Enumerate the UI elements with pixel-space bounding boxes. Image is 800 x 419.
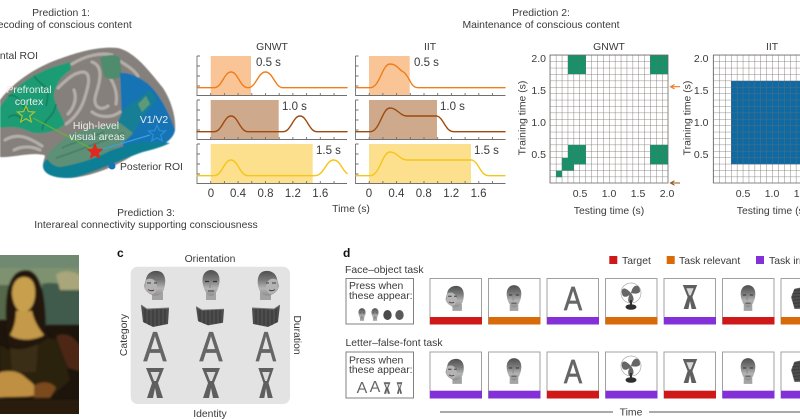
connection lines — [33, 118, 150, 150]
chart: GNWT time courses: 0.8 — [258, 188, 274, 200]
legend: posterior ROI: Posterior ROI — [120, 162, 183, 173]
chart: GNWT temporal generalization matrix: 1.0 — [531, 117, 546, 129]
task: letter-false-font: these appear: — [349, 365, 413, 376]
stimulus sequence: face-object — [430, 278, 800, 324]
chart: GNWT time courses: 1.6 — [312, 188, 328, 200]
panel c label: c — [117, 246, 124, 260]
task: letter-false-font: A — [357, 380, 368, 397]
chart: GNWT time courses: 1.0 s — [282, 101, 307, 113]
face row — [144, 270, 279, 300]
chart: GNWT time courses: 0.4 — [230, 188, 247, 200]
task: face-object: Press when — [349, 281, 404, 292]
legend: stimulus types — [609, 256, 800, 267]
chart: IIT time courses — [356, 42, 506, 200]
chart: IIT time courses: 0 — [366, 188, 372, 200]
axis label: time: Time (s) — [332, 204, 370, 215]
chart: GNWT temporal generalization matrix: 0.5 — [531, 149, 546, 161]
chart: IIT time courses: IIT — [424, 42, 437, 53]
brain labels: V1/V2 — [140, 115, 168, 126]
brain illustration — [0, 48, 175, 178]
chart: IIT time courses: 0.5 s — [414, 57, 439, 69]
chart: IIT time courses: 0.8 — [416, 188, 432, 200]
painting: Mona Lisa — [0, 252, 82, 416]
letter row: A — [256, 323, 277, 370]
time axis: Time — [620, 408, 643, 418]
chart: GNWT temporal generalization matrix: 2.0 — [531, 53, 546, 65]
chart: IIT temporal generalization matrix: 1.0 — [694, 117, 709, 129]
panel c axis labels: Duration — [291, 315, 302, 355]
chart: GNWT temporal generalization matrix: 0.5 — [573, 188, 587, 200]
chart: GNWT temporal generalization matrix — [518, 42, 674, 217]
chart: IIT time courses: 0.4 — [388, 188, 405, 200]
chart: GNWT temporal generalization matrix: Training time (s) — [518, 81, 528, 155]
icon: high-level visual star — [86, 143, 104, 159]
task: face-object: Face–object task — [345, 265, 424, 276]
chart: GNWT time courses: 1.5 s — [316, 145, 341, 157]
brain labels: High-level — [73, 121, 119, 132]
chart: IIT temporal generalization matrix: 0.5 — [736, 188, 750, 200]
icon: V1/V2 star — [148, 125, 166, 141]
task: letter-false-font: A — [370, 379, 381, 396]
stimulus sequence: face-object: A — [564, 282, 583, 318]
chart: GNWT temporal generalization matrix: Testing time (s) — [574, 206, 644, 217]
task: letter-false-font: Letter–false-font task — [346, 338, 443, 349]
heading: prediction 3: Interareal connectivity supporting consciousness — [34, 220, 258, 231]
stimulus sequence: letter-false-font — [430, 352, 800, 398]
task: letter-false-font — [346, 338, 443, 398]
brain labels: Prefrontal — [6, 85, 52, 96]
letter row — [144, 323, 277, 371]
legend: stimulus types: Task relevant — [679, 256, 740, 267]
chart: IIT time courses: 1.2 — [443, 188, 459, 200]
panel c axis labels — [119, 254, 302, 419]
chart: IIT time courses: 1.0 s — [440, 101, 465, 113]
panel: stimuli grid — [131, 267, 290, 404]
chart: IIT time courses: 1.5 s — [474, 145, 499, 157]
chart: GNWT time courses: GNWT — [256, 42, 289, 53]
chart: IIT temporal generalization matrix: 1.5 — [694, 85, 709, 97]
false-font row — [146, 368, 274, 398]
stimulus sequence: letter-false-font: A — [564, 355, 583, 391]
chart: GNWT time courses: 0.5 s — [256, 57, 281, 69]
task: letter-false-font: Press when — [349, 356, 404, 367]
heading: prediction 3: Prediction 3: — [117, 208, 175, 219]
brain labels — [6, 85, 168, 143]
heading: prediction 1: Prediction 1: — [32, 8, 90, 19]
task: face-object — [345, 265, 424, 324]
panel d label: d — [343, 246, 350, 260]
chart: IIT temporal generalization matrix: 2.0 — [694, 53, 709, 65]
brain labels: cortex — [15, 97, 44, 108]
letter row: A — [144, 324, 167, 371]
heading: prediction 1 — [0, 8, 132, 31]
heading: prediction 2 — [462, 8, 620, 31]
chart: GNWT temporal generalization matrix: 1.0 — [602, 188, 616, 200]
brain labels: visual areas — [69, 132, 125, 143]
chart: GNWT temporal generalization matrix: 1.5 — [631, 188, 645, 200]
legend: stimulus types: Target — [622, 256, 651, 267]
letter row: A — [200, 324, 223, 371]
panel c axis labels: Category — [119, 313, 130, 356]
chart: GNWT time courses — [197, 42, 347, 200]
arrow: brown marker — [670, 181, 680, 185]
icon: prefrontal star — [18, 106, 34, 122]
chart: GNWT temporal generalization matrix: 2.0 — [660, 188, 674, 200]
chart: GNWT time courses: 0 — [208, 188, 214, 200]
chart: GNWT time courses: 1.2 — [285, 188, 301, 200]
chart: IIT temporal generalization matrix: 1.0 — [765, 188, 779, 200]
chart: IIT temporal generalization matrix: IIT — [766, 42, 779, 53]
heading: prediction 2: Prediction 2: — [512, 8, 570, 19]
chart: IIT temporal generalization matrix — [682, 42, 800, 217]
chart: GNWT temporal generalization matrix: 1.5 — [531, 85, 546, 97]
arrow: orange marker — [670, 84, 680, 89]
heading: prediction 3 — [34, 208, 258, 231]
chart: GNWT temporal generalization matrix: GNWT — [593, 42, 626, 53]
chart: IIT temporal generalization matrix: Training time (s) — [682, 81, 694, 155]
task: face-object: these appear: — [349, 291, 413, 302]
object row — [141, 305, 280, 327]
panel c axis labels: Orientation — [185, 254, 236, 265]
heading: prediction 2: Maintenance of conscious content — [462, 20, 620, 31]
chart: IIT temporal generalization matrix: 0.5 — [694, 149, 709, 161]
chart: IIT time courses: 1.6 — [471, 188, 487, 200]
